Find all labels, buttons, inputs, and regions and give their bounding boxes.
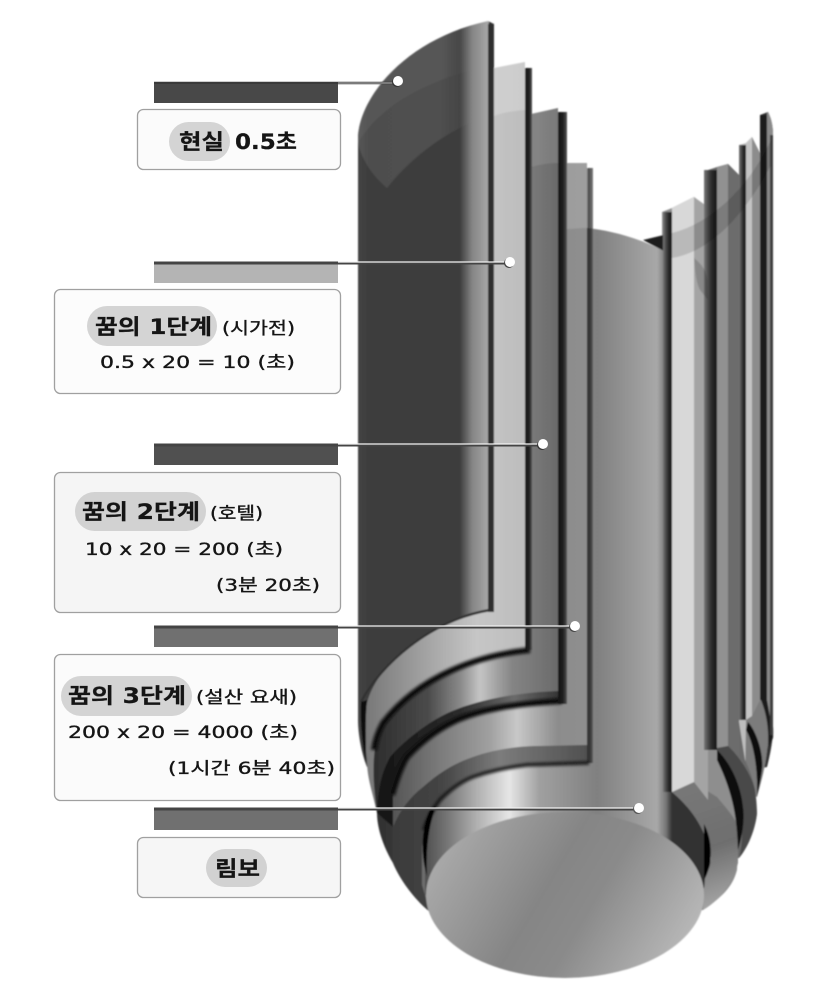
- formula: level 1: 0.5 x 20 = 10 (초): [100, 353, 295, 373]
- color bar: level 1: [154, 264, 338, 283]
- layer 4 left lip: [393, 745, 587, 912]
- heading: level 3: 꿈의 3단계: [68, 684, 186, 708]
- layer 3 bottom lip: [377, 691, 560, 827]
- pill: limbo: [206, 849, 267, 887]
- connector: reality: [154, 76, 403, 87]
- formula: level 3: 200 x 20 = 4000 (초): [68, 723, 298, 743]
- bottom cap ellipse: [426, 812, 704, 978]
- right strip: layer 2 shadow: [739, 145, 746, 720]
- right translucent lower band: [694, 258, 708, 300]
- location: level 3: (설산 요새): [196, 688, 297, 708]
- core left black crescent: [423, 806, 436, 876]
- core cylinder: [425, 228, 711, 895]
- duration: level 3: (1시간 6분 40초): [168, 759, 335, 779]
- pill: reality: [169, 122, 230, 161]
- layer 2 lower right surface: [745, 700, 770, 797]
- panel: dream level 1: [54, 290, 340, 394]
- panel: dream level 3: [54, 654, 340, 800]
- pill: level 3: [61, 676, 192, 716]
- connector: limbo: [154, 803, 644, 814]
- layer 1: reality shell: [358, 21, 773, 800]
- layer 3 vertical edge: [558, 112, 567, 704]
- right strip: layer 2 face: [746, 137, 752, 720]
- layer 3 strip and band: [374, 108, 757, 880]
- right strip: layer 3 bevel: [728, 164, 739, 775]
- heading: reality: 현실: [179, 130, 224, 154]
- location: level 1: (시가전): [222, 319, 295, 339]
- right strip: layer 1 face: [767, 112, 773, 733]
- layer 4 strip and band: [393, 163, 744, 930]
- layer 4 lip inner shadow: [424, 763, 589, 830]
- layer 3 top translucent area: [531, 108, 558, 167]
- layer 1 inner crescent: [358, 70, 472, 188]
- heading: limbo: 림보: [215, 857, 260, 881]
- right strip: layer 3 shadow: [704, 170, 717, 750]
- core back dark wedge: [643, 233, 672, 255]
- layer 2 top translucent area: [494, 62, 525, 116]
- heading: level 1: 꿈의 1단계: [95, 315, 212, 339]
- right strip: layer 4 bevel: [694, 197, 708, 800]
- panel: limbo: [138, 838, 340, 898]
- core right black crescent: [704, 824, 711, 880]
- color bar: level 2: [154, 446, 338, 465]
- color bar: reality: [154, 84, 338, 103]
- connector: level 3: [154, 621, 580, 632]
- layer 1 vertical edge: [488, 24, 494, 612]
- layer 2 vertical edge: [525, 68, 532, 650]
- layer 1 right lip: [761, 700, 773, 748]
- layer 2 bottom shadow: [374, 650, 530, 750]
- right strip: layer 2 bevel: [752, 137, 760, 716]
- panel: dream level 2: [54, 472, 340, 612]
- right strip: layer 4 light face: [672, 197, 694, 792]
- location: level 2: (호텔): [210, 504, 263, 524]
- layer 2 shadow left side: [361, 700, 367, 762]
- cylinder illustration: nested dream layers: [358, 21, 773, 978]
- layer 2 strip and band: [365, 62, 768, 830]
- layer 3 bottom shadow: [392, 701, 562, 795]
- panel: reality: [138, 110, 340, 170]
- right strip: layer 4 dark edge: [663, 212, 672, 792]
- right strip: layer 2 lower shadow: [746, 722, 762, 796]
- pill: level 2: [75, 492, 206, 531]
- layer 4 right lip: [672, 782, 738, 910]
- connector: level 1: [154, 257, 515, 268]
- layer 1 bottom edge: [361, 610, 490, 702]
- layer 4 vertical edge: [587, 168, 593, 763]
- formula: level 2: 10 x 20 = 200 (초): [85, 540, 283, 560]
- right strip: layer 3 lower shadow: [717, 750, 744, 850]
- value: 0.5 seconds: 0.5초: [235, 130, 297, 154]
- layer 1 top crescent: [358, 26, 472, 143]
- layer 4 top translucent area: [567, 163, 587, 229]
- right strip: layer 1 shadow: [760, 115, 767, 700]
- right translucent arc band: [672, 140, 771, 258]
- right strip: layer 3 face: [717, 164, 728, 750]
- right strip: layer 1 outer dark: [770, 135, 773, 735]
- connector: level 2: [154, 439, 548, 450]
- color bar: limbo: [154, 810, 338, 830]
- heading: level 2: 꿈의 2단계: [82, 500, 200, 524]
- right strip: layer 3 outer lower: [717, 746, 757, 858]
- duration: level 2: (3분 20초): [216, 576, 320, 596]
- pill: level 1: [87, 306, 217, 346]
- color bar: level 3: [154, 628, 338, 647]
